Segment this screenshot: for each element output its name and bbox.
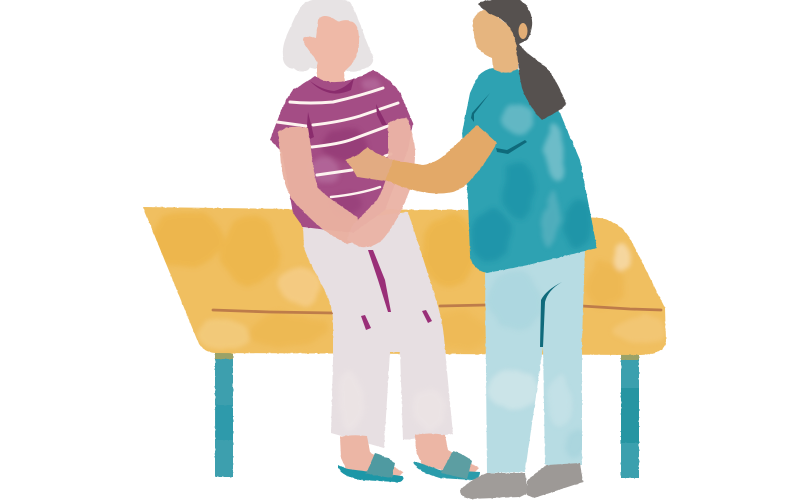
trouser crease: [540, 282, 562, 347]
trouser creases: [361, 250, 432, 330]
ear: [518, 23, 528, 39]
tunic: [462, 68, 597, 273]
face and neck: [303, 16, 359, 84]
exam table: [143, 207, 666, 478]
trouser shading: [337, 370, 446, 430]
hair: [283, 0, 373, 72]
older woman patient: [270, 0, 480, 482]
table leg: right: [621, 352, 639, 478]
striped shirt: [270, 70, 413, 233]
trousers: [303, 212, 453, 448]
shoes: [460, 463, 583, 499]
hair and ponytail: [478, 0, 566, 120]
table leg: left: [215, 351, 233, 477]
table seam line: [213, 305, 661, 313]
table top: [143, 207, 666, 355]
tunic marks: [471, 93, 527, 154]
shirt stripes: [277, 88, 398, 197]
sleeve marks: [307, 104, 387, 139]
arm: [385, 125, 497, 194]
feet: [340, 434, 479, 478]
collar: [310, 78, 354, 94]
hand: [345, 147, 393, 181]
nurse: [345, 0, 597, 499]
arms crossed: [278, 118, 415, 247]
face and neck: [473, 10, 518, 73]
slippers: [338, 451, 480, 482]
illustration: nurse comforting an older patient beside an exam table: [143, 0, 666, 500]
scrub trousers: [485, 250, 585, 473]
